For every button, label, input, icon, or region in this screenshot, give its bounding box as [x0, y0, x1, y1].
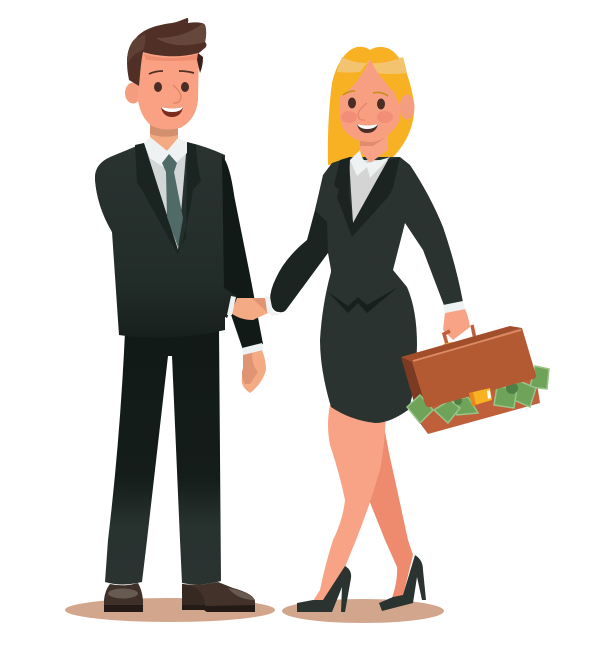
man collar — [144, 137, 187, 167]
briefcase clasp — [469, 388, 492, 406]
briefcase side — [401, 357, 428, 434]
woman mouth — [357, 124, 378, 133]
woman ear — [400, 94, 414, 120]
woman right cuff — [443, 301, 465, 313]
dollar marks on money — [454, 382, 518, 405]
man tie — [162, 154, 183, 247]
handshake — [227, 296, 283, 320]
man ear — [125, 82, 141, 104]
man far hand — [242, 350, 266, 393]
briefcase highlight — [413, 330, 521, 361]
woman shirt — [349, 160, 388, 223]
woman lapels — [334, 157, 400, 237]
man hair — [127, 18, 206, 86]
woman hair back — [328, 47, 414, 165]
woman handshake arm — [270, 173, 330, 312]
man nose — [173, 85, 181, 103]
briefcase handle brackets — [443, 335, 480, 348]
man trousers — [105, 328, 221, 585]
briefcase lid — [412, 328, 536, 407]
woman figure — [270, 47, 549, 612]
woman cheeks — [341, 111, 393, 123]
briefcase handle — [444, 325, 475, 344]
man eyes — [154, 82, 189, 92]
man right shoe — [182, 582, 255, 612]
money notes — [407, 366, 549, 423]
woman back shoe — [379, 555, 426, 611]
woman nose — [358, 103, 367, 120]
man far cuff — [242, 343, 263, 355]
briefcase body — [412, 370, 540, 434]
man eyebrows — [149, 71, 194, 74]
woman face — [340, 59, 400, 142]
man face — [137, 50, 199, 130]
hand over handle — [450, 312, 470, 338]
woman skirt — [320, 270, 417, 423]
man left shoe — [104, 583, 143, 612]
man mouth — [161, 107, 183, 117]
briefcase with money — [401, 312, 549, 434]
woman front leg — [313, 405, 386, 602]
woman eyebrows — [343, 91, 388, 96]
ground shadow: man — [65, 598, 275, 622]
woman front shoe — [297, 566, 351, 612]
man near sleeve — [95, 158, 236, 318]
woman collar — [350, 150, 390, 178]
woman jacket — [315, 157, 463, 308]
man jacket right edge — [222, 155, 242, 290]
woman eyes — [348, 98, 385, 110]
woman near hand — [443, 309, 470, 340]
man figure — [95, 18, 266, 612]
man lapels — [135, 142, 201, 255]
woman back leg — [365, 418, 413, 598]
woman hair highlight — [337, 57, 407, 74]
man jacket — [95, 142, 225, 338]
woman neck — [360, 135, 388, 163]
man far sleeve — [218, 155, 263, 350]
ground shadow: woman — [282, 599, 444, 623]
man neck — [150, 120, 178, 151]
woman waist detail — [328, 287, 398, 313]
man shirt — [146, 150, 187, 250]
